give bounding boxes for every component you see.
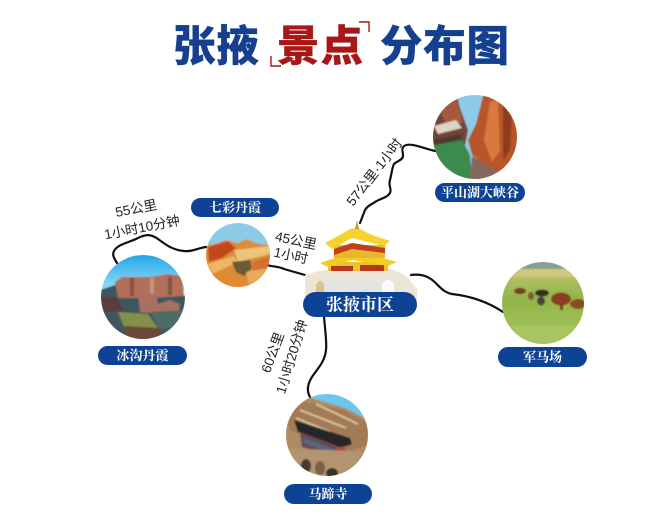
tower: lower walls [328, 262, 388, 271]
route: Qicai Danxia to Binggou Danxia [113, 235, 206, 263]
label: 57 km route: 57公里·1小时 [344, 136, 405, 209]
label: 45 km route: 45公里 [274, 229, 318, 252]
pill: Junma Ranch: 军马场 [523, 350, 562, 364]
tower: upper walls [334, 245, 385, 258]
title: 分布图: 分布图 [380, 24, 509, 71]
pill: Mati Temple [284, 484, 372, 504]
pill: Zhangye city: 张掖市区 [326, 294, 394, 314]
pill: Qicai Danxia: 七彩丹霞 [209, 200, 261, 215]
pill: Qicai Danxia [191, 198, 279, 217]
photo: Binggou Danxia [100, 254, 186, 345]
photo: Pingshan Lake Grand Canyon [433, 95, 517, 179]
pill: Pingshan Lake Grand Canyon: 平山湖大峡谷 [441, 185, 519, 200]
pill: Mati Temple: 马蹄寺 [308, 486, 348, 502]
label: 45 km route: 1小时 [272, 245, 309, 267]
pill: Junma Ranch [498, 347, 587, 367]
illustration: Zhangye city tower [305, 220, 417, 300]
label: 55 km route: 55公里 [114, 197, 158, 220]
photo: Junma Ranch [500, 260, 586, 346]
tower: lower roof [320, 250, 397, 267]
label: 60 km route: 1小时20分钟 [272, 318, 310, 395]
pill: Binggou Danxia: 冰沟丹霞 [116, 348, 169, 363]
label: 45 km route [272, 229, 318, 267]
pill: Pingshan Lake Grand Canyon [435, 183, 525, 202]
label: 55 km route: 1小时10分钟 [103, 212, 181, 242]
pill: Binggou Danxia [98, 346, 187, 365]
pill: Zhangye city [303, 292, 417, 317]
photo: Mati Temple [285, 393, 369, 478]
route: Zhangye to Qicai Danxia [267, 265, 305, 275]
route: Zhangye to Mati Temple [308, 316, 326, 397]
title: 景点: 景点 [277, 24, 363, 71]
route: Zhangye to Junma Ranch [411, 275, 503, 312]
title: 张掖: 张掖 [173, 24, 259, 71]
photo: Qicai Danxia [206, 223, 270, 287]
title: corner brackets [271, 22, 369, 66]
route: Zhangye to Pingshan Lake [360, 145, 435, 223]
tower: upper roof [325, 228, 390, 249]
label: 60 km route: 60公里 [259, 330, 287, 375]
tower: spire [355, 220, 359, 229]
tower: base wall [305, 269, 417, 300]
label: 55 km route [103, 197, 181, 242]
title [173, 22, 509, 71]
